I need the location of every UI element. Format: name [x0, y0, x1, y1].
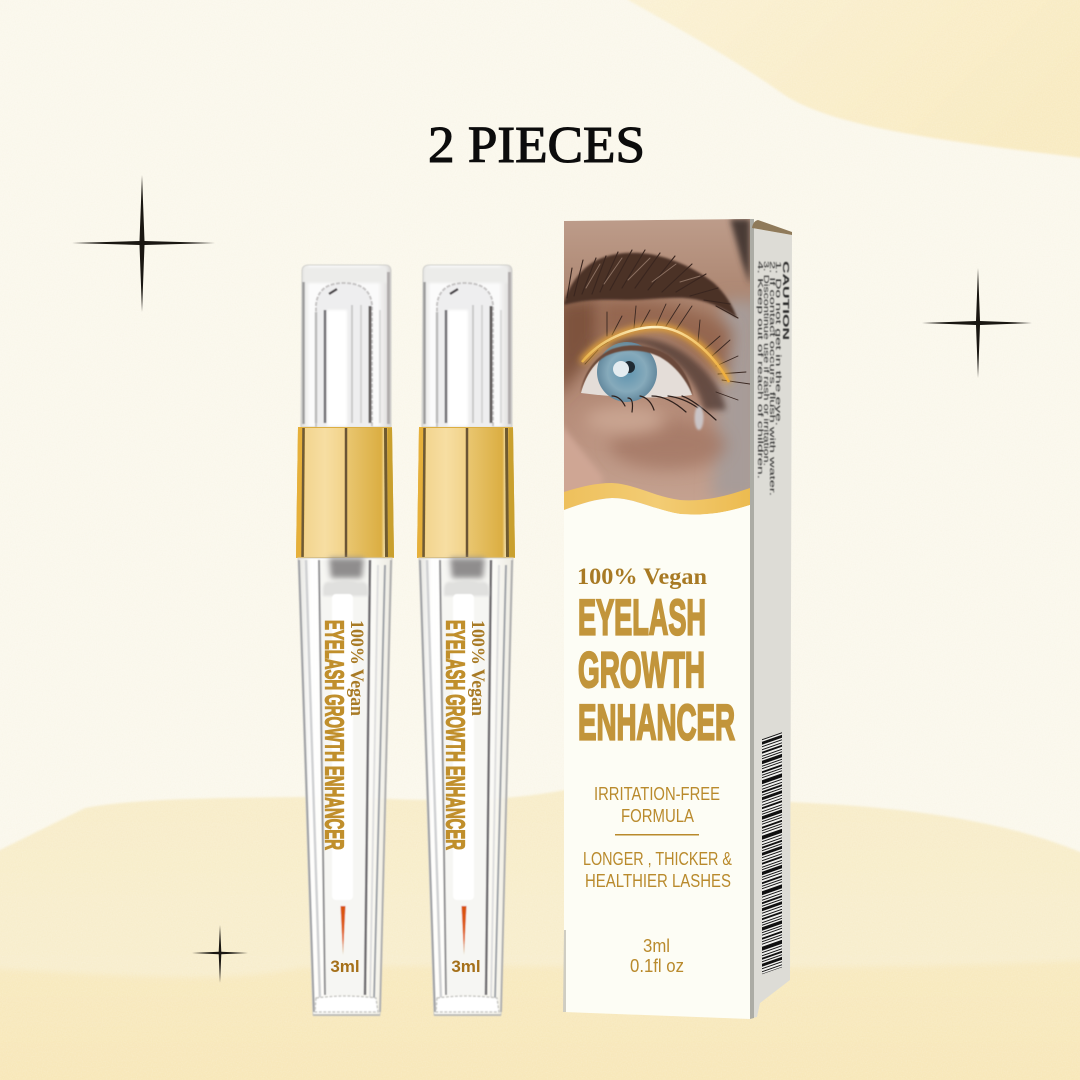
tube 1 cap — [301, 265, 391, 427]
box heading — [577, 564, 735, 750]
tube 2 gold collar — [417, 427, 515, 558]
lower lashes — [612, 396, 716, 420]
product box — [555, 219, 792, 1019]
icon: sparkle small bottom — [192, 925, 248, 983]
tube 1 gold collar — [296, 427, 394, 558]
side caution text: 2. If contact occurs, flush with water. — [768, 261, 775, 496]
box claims: IRRITATION-FREE — [594, 784, 720, 804]
iris — [597, 342, 657, 402]
box heading: ENHANCER — [578, 694, 735, 750]
box claims: HEALTHIER LASHES — [585, 871, 731, 891]
side caution text: 4. Keep out of reach of children. — [756, 261, 763, 479]
icon: sparkle right — [922, 268, 1032, 378]
tube 2 label text — [440, 620, 487, 976]
gold wave — [564, 483, 750, 515]
eye photo — [555, 219, 760, 511]
tube 1 label text — [320, 620, 366, 976]
temple shading — [730, 219, 750, 285]
box claims: LONGER , THICKER & — [583, 849, 732, 869]
tube 1 label text: 100% Vegan — [346, 620, 366, 717]
box heading: EYELASH — [578, 590, 706, 646]
box volume: 0.1fl oz — [630, 956, 684, 976]
tube 1 body — [298, 558, 392, 1015]
eye white — [581, 349, 692, 397]
tube 2 cap — [422, 265, 512, 427]
box volume — [630, 936, 684, 976]
side caution text: CAUTION — [781, 261, 791, 340]
side caution text: 3. Discontinue use if rash or irritation. — [762, 261, 769, 466]
icon: sparkle large left — [72, 175, 215, 312]
tube 2 label text: EYELASH GROWTH ENHANCER — [440, 620, 470, 850]
tube 2 label text: 3ml — [451, 957, 481, 976]
box volume: 3ml — [643, 936, 670, 956]
box heading: 100% Vegan — [577, 564, 707, 590]
title: 2 PIECES — [428, 117, 645, 174]
box claims — [583, 784, 732, 891]
box claims: FORMULA — [621, 806, 694, 826]
box front panel — [564, 219, 750, 1019]
eyebrow — [564, 253, 737, 318]
golden lash arc — [582, 327, 729, 382]
box heading: GROWTH — [578, 642, 705, 698]
tube 1 label text: 3ml — [330, 957, 360, 976]
product: tube 1 — [296, 265, 394, 1015]
tube 1 label text: EYELASH GROWTH ENHANCER — [320, 620, 350, 850]
side caution text — [756, 261, 791, 496]
barcode — [762, 732, 782, 974]
box side panel — [750, 219, 792, 1019]
dark lash mass — [600, 338, 726, 410]
side caution text: 1. Do not get in the eye. — [774, 261, 781, 426]
upper lashes — [585, 304, 750, 400]
eyelid edge — [580, 345, 693, 396]
product: tube 2 — [417, 265, 515, 1015]
tube 2 label text: 100% Vegan — [467, 620, 487, 717]
tube 2 body — [419, 558, 513, 1015]
